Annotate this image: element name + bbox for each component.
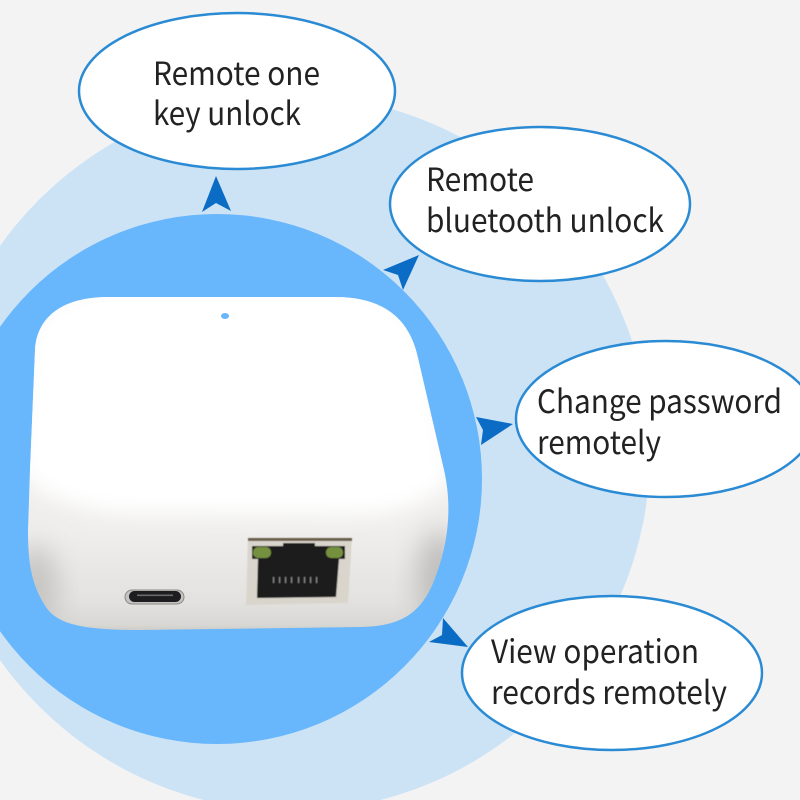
USB-C port bbox=[125, 590, 184, 604]
arrow: to remote bluetooth unlock bbox=[383, 255, 419, 290]
arrow: to change password remotely bbox=[476, 417, 513, 445]
outer light blue circle bbox=[0, 95, 650, 800]
gateway device bbox=[28, 297, 448, 630]
arrow: up to remote one key unlock bbox=[202, 176, 231, 212]
bubble: change password remotely: remotely bbox=[537, 418, 661, 464]
bubble: view operation records remotely bbox=[462, 596, 762, 750]
arrow: to view operation records bbox=[429, 618, 468, 647]
status LED bbox=[221, 313, 229, 319]
device body bbox=[28, 297, 448, 630]
bubble: remote bluetooth unlock: Remote bbox=[426, 155, 534, 201]
bubble: remote one key unlock: key unlock bbox=[153, 89, 301, 135]
bubble: change password remotely: Change password bbox=[537, 377, 782, 423]
bubble: remote one key unlock: Remote one bbox=[153, 49, 320, 95]
inner blue circle bbox=[0, 214, 482, 744]
bubble: view operation records remotely: records remotely bbox=[491, 668, 727, 714]
bubble: view operation records remotely: View operation bbox=[491, 627, 699, 673]
bubble: change password remotely bbox=[516, 341, 800, 497]
contact pins bbox=[273, 577, 317, 583]
bubble: remote bluetooth unlock: bluetooth unlock bbox=[426, 196, 664, 242]
bubble: remote bluetooth unlock bbox=[390, 127, 690, 281]
bubble: remote one key unlock bbox=[79, 13, 395, 169]
RJ45 ethernet port bbox=[246, 538, 352, 605]
